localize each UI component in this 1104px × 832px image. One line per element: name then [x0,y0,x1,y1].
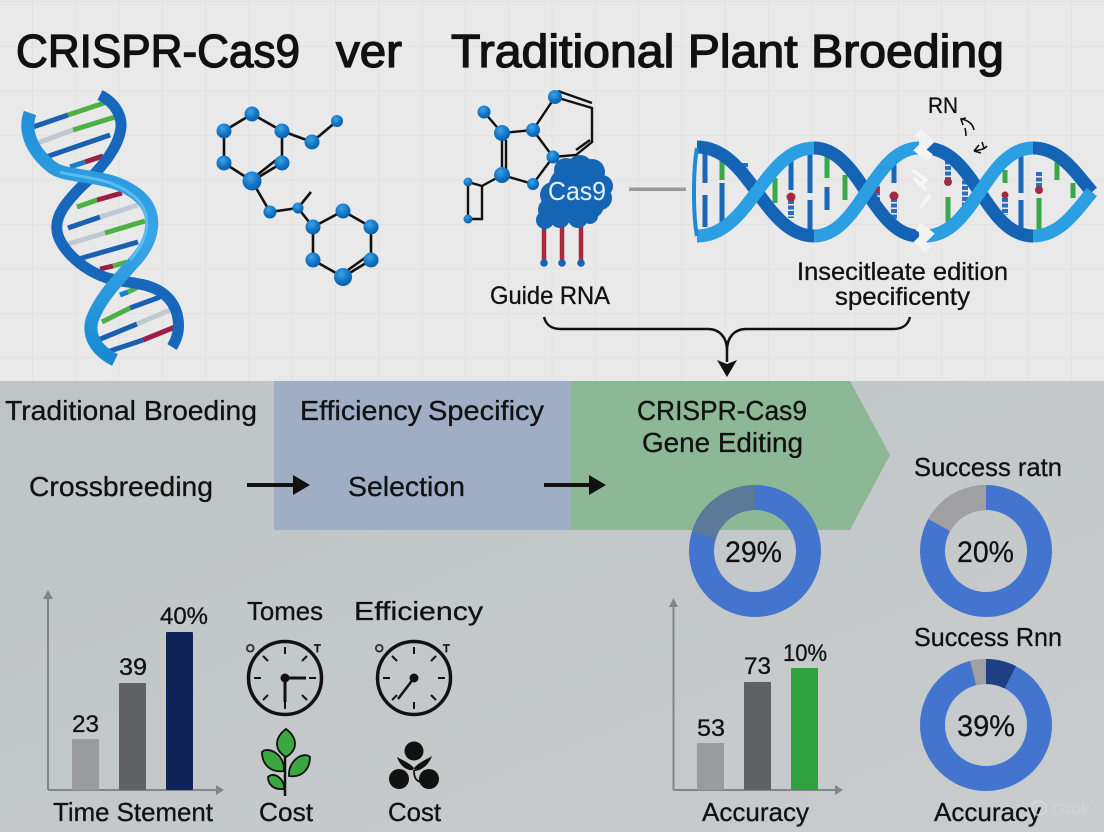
donut chart: 29%: 29% [725,536,782,569]
panel: efficiency stage [274,381,571,530]
bar chart: accuracy: Accuracy [702,797,809,827]
bar chart: accuracy: 10% [783,640,827,667]
icon: clock 1: T [314,643,321,655]
icon: clock 2 [375,642,450,714]
icon: clock 1: O [246,643,255,655]
icon: clock 2: T [443,643,450,655]
donut chart: 20% [932,498,1040,604]
icon: molecule structure [216,106,378,286]
label: Cost right: Cost [388,797,442,827]
icon: Cas9 complex with guide RNA [464,90,613,267]
bar chart: time statement [43,590,224,827]
arrow: selection to editing [544,475,606,495]
heading: CRISPR-Cas9 Gene Editing: Gene Editing [642,427,803,458]
heading: Traditional Breeding: Traditional Broeding [5,395,257,426]
bar chart: time statement: 39 [119,654,147,681]
bar chart: accuracy [669,598,843,827]
label: RN with small arrows: RN [928,93,958,118]
connector line [629,188,686,191]
donut chart: 39% [932,672,1040,778]
bar chart: time statement: 40% [160,603,208,630]
title: ver [336,25,402,77]
bar chart: accuracy: 53 [697,715,725,742]
watermark [1032,801,1091,818]
label: edition specificity: specificenty [835,283,971,311]
heading: CRISPR-Cas9 Gene Editing [637,395,807,458]
label: Accuracy right: Accuracy [934,797,1041,827]
heading: Success ratn: Success ratn [914,452,1062,482]
heading: Tomes: Tomes [247,596,323,626]
title [16,25,1004,77]
donut chart: 20%: 20% [957,536,1014,569]
bar chart: accuracy: 73 [744,653,771,680]
heading: Efficiency Specificity: Specificy [428,395,544,426]
heading: Efficiency Specificity: Efficiency [300,395,422,426]
icon: edited DNA helix with cut site [694,132,1092,250]
icon: clock 2: O [375,643,384,655]
panel: CRISPR stage arrow [571,381,890,530]
label: Cas9: Cas9 [548,176,606,206]
title: CRISPR-Cas9 [16,25,300,77]
label: Crossbreeding: Crossbreeding [29,471,213,502]
label: edition specificity [797,258,1008,311]
title: Traditional Plant Broeding [451,25,1004,77]
label: Guide RNA: Guide RNA [490,282,610,310]
donut chart: 39%: 39% [957,710,1015,743]
icon: DNA double helix [28,95,178,360]
label: edition specificity: Insecitleate edition [797,258,1008,286]
label: Selection: Selection [348,471,465,502]
watermark: Grok [1052,801,1091,818]
arrow: crossbreeding to selection [247,475,310,495]
bar chart: time statement: Time Stement [53,797,214,827]
donut chart: 29% [702,498,808,604]
heading: Efficiency: Efficiency [354,596,483,626]
panel: process band [274,381,890,530]
bar chart: time statement: 23 [72,711,99,738]
label: Cost left: Cost [259,797,314,827]
arrow: merging bracket [544,317,910,377]
heading: CRISPR-Cas9 Gene Editing: CRISPR-Cas9 [637,395,807,426]
heading: Success Rnn: Success Rnn [914,622,1062,652]
icon: plant [262,729,310,796]
heading: Efficiency Specificity [300,395,544,426]
icon: clock 1 [246,642,322,714]
icon: seed cluster [389,742,439,789]
label: RN with small arrows [928,93,987,153]
